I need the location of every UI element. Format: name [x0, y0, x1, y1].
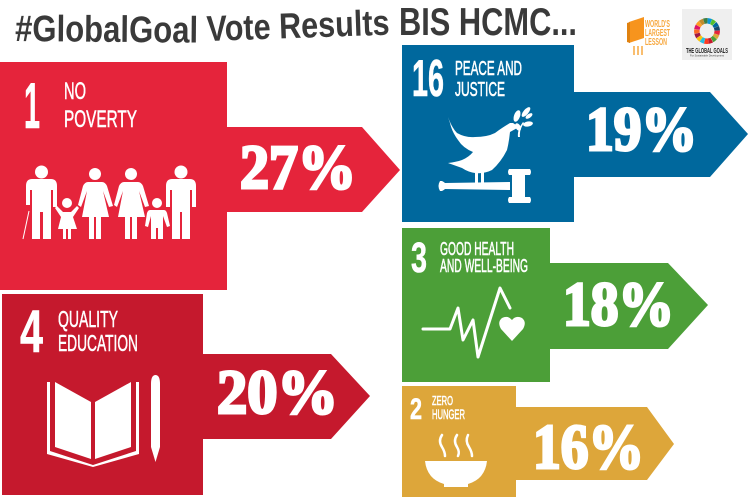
- panel: goal 4 quality education: [2, 294, 370, 495]
- goal label: NO: [64, 78, 86, 105]
- logo: the global goals: For Sustainable Development: [690, 54, 724, 58]
- icon: bowl: [425, 435, 487, 487]
- panel: goal 4 quality education: EDUCATION: [58, 330, 138, 356]
- panel: goal 2 zero hunger: HUNGER: [432, 407, 465, 422]
- panel: goal 1 no poverty: [0, 62, 400, 290]
- logo: the global goals: [682, 9, 732, 60]
- goal number 3: 3: [411, 234, 427, 282]
- title: [15, 1, 577, 51]
- logo: world's largest lesson: [627, 17, 670, 55]
- panel: goal 16 peace and justice: JUSTICE: [455, 78, 505, 101]
- goal label: QUALITY: [58, 306, 118, 332]
- title: #GlobalGoal: [15, 8, 198, 51]
- panel: goal 3 good health: [402, 228, 708, 382]
- percentage 16%: 16%: [533, 412, 644, 482]
- icon: heartbeat: [423, 288, 525, 357]
- icon: book and pencil: [47, 375, 160, 467]
- panel: goal 16 peace and justice: [402, 45, 748, 222]
- title: BIS HCMC...: [399, 1, 577, 44]
- logo: world's largest lesson: LESSON: [645, 37, 667, 48]
- percentage 19%: 19%: [586, 96, 697, 164]
- title: Vote Results: [206, 2, 390, 49]
- percentage 18%: 18%: [563, 271, 674, 339]
- percentage 20%: 20%: [217, 359, 338, 427]
- goal number 4: 4: [20, 298, 43, 365]
- percentage 27%: 27%: [240, 134, 356, 202]
- goal label: ZERO: [432, 394, 453, 408]
- panel: goal 3 good health: AND WELL-BEING: [440, 256, 528, 276]
- logo: world's largest lesson: WORLD'S: [645, 19, 670, 30]
- goal number 2: 2: [410, 393, 422, 426]
- goal label: GOOD HEALTH: [440, 239, 514, 259]
- logo: world's largest lesson: LARGEST: [645, 28, 670, 39]
- goal number 16: 16: [412, 50, 444, 108]
- goal label: PEACE AND: [455, 57, 522, 80]
- panel: goal 2 zero hunger: [402, 386, 674, 497]
- icon: family: [23, 166, 196, 239]
- panel: goal 1 no poverty: POVERTY: [64, 106, 137, 133]
- panel: goal 1 no poverty: 1: [24, 69, 40, 142]
- icon: dove and gavel: [438, 106, 533, 203]
